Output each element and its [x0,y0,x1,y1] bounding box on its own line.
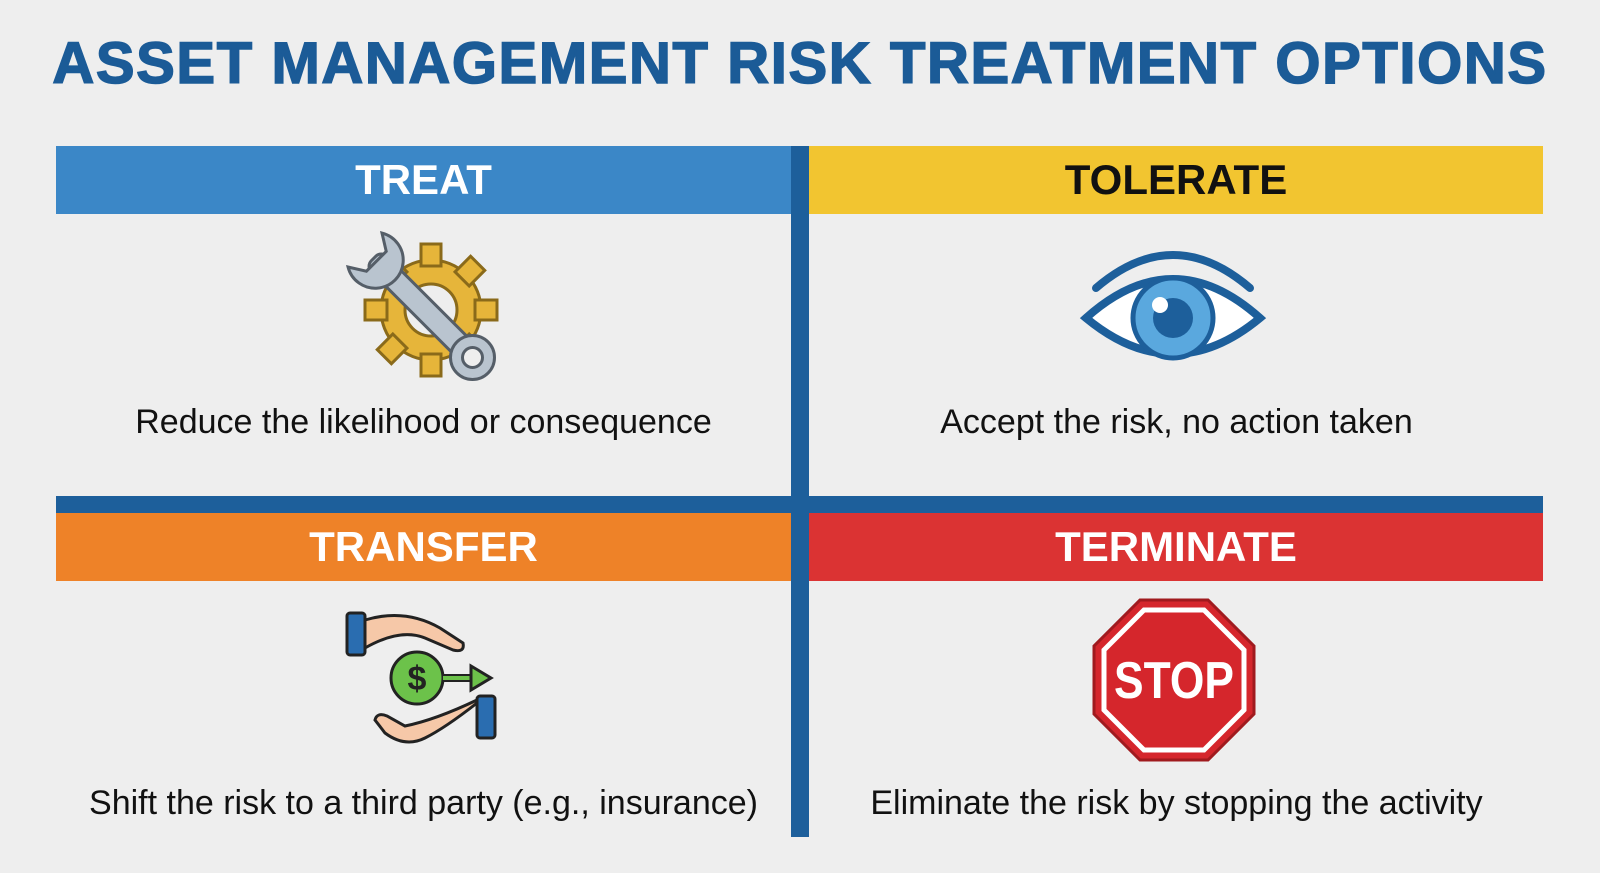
header: terminate [809,513,1543,581]
header: tolerate: TOLERATE [1065,156,1287,203]
divider horizontal [56,496,1543,513]
text: tolerate: Accept the risk, no action taken [940,403,1413,441]
icon: eye [1080,251,1266,360]
text: treat: Reduce the likelihood or consequence [135,403,712,441]
icon: transfer hands and coin: $ [408,660,427,698]
title: ASSET MANAGEMENT RISK TREATMENT OPTIONS [52,31,1548,96]
header: transfer: TRANSFER [309,523,538,570]
divider vertical [791,146,809,837]
header: transfer [56,513,791,581]
header: terminate: TERMINATE [1055,523,1297,570]
text: transfer: Shift the risk to a third party (e.g., insurance) [89,784,758,822]
icon: gear and wrench [346,231,498,381]
icon: transfer hands and coin [346,612,496,744]
icon: stop sign [1092,598,1256,762]
header: tolerate [809,146,1543,214]
text: terminate: Eliminate the risk by stopping the activity [870,784,1483,822]
icon: stop sign: STOP [1114,652,1234,710]
header: treat [56,146,791,214]
header: treat: TREAT [355,156,492,203]
